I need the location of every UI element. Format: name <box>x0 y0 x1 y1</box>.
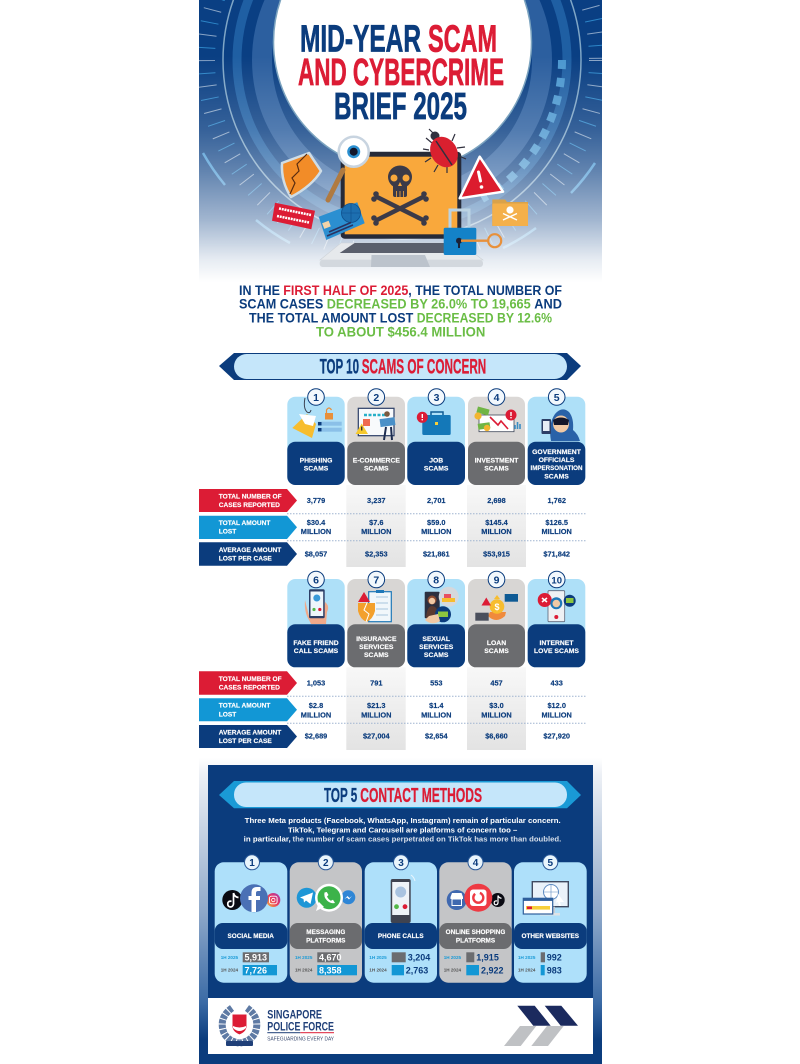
chart: 1H 2025 vs 1H 2024: 1H 2025 <box>444 955 462 960</box>
icons: marketplace, carousell, tiktok <box>447 884 505 912</box>
row labels <box>199 489 297 566</box>
card: phone calls <box>365 855 437 983</box>
chart: 1H 2025 vs 1H 2024: 5,913 <box>244 953 267 963</box>
card: investment scams <box>468 389 525 485</box>
icon: website monitor and browser <box>523 882 568 916</box>
card: other websites: OTHER WEBSITES <box>522 933 580 940</box>
icon: phone <box>391 875 415 923</box>
table values row 1 to 5: MILLION <box>481 527 512 536</box>
card: investment scams: INVESTMENT <box>475 457 519 464</box>
table values row 1 to 5: $30.4 <box>307 518 326 527</box>
row labels: CASES REPORTED <box>219 685 280 692</box>
chart: 1H 2025 vs 1H 2024 <box>295 952 357 976</box>
title: AND CYBERCRIME <box>298 52 504 94</box>
chart: 1H 2025 vs 1H 2024: 1H 2025 <box>221 955 239 960</box>
card: sexual services scams: SCAMS <box>424 652 449 659</box>
summary paragraph: IN THE <box>239 283 280 298</box>
intro text: Three Meta products (Facebook, WhatsApp, Instagram) remain of particular concern. <box>245 816 561 825</box>
card: fake friend call scams: CALL SCAMS <box>294 648 339 655</box>
card: messaging platforms: MESSAGING <box>306 929 345 936</box>
grey column backgrounds <box>346 485 526 567</box>
card: fake friend call scams <box>287 571 345 667</box>
card: online shopping platforms <box>439 855 512 983</box>
card: loan scams: SCAMS <box>484 648 509 655</box>
card: government officials impersonation scams: SCAMS <box>544 473 569 480</box>
table values row 1 to 5: $59.0 <box>427 518 446 527</box>
number badge 9: 9 <box>494 574 500 586</box>
number badge 2: 2 <box>373 392 379 404</box>
summary paragraph: , THE TOTAL NUMBER OF <box>408 283 562 298</box>
icon: credit card <box>319 202 365 240</box>
chart: 1H 2025 vs 1H 2024: 1,915 <box>476 953 499 963</box>
row labels: LOST <box>219 711 236 718</box>
summary paragraph: SCAM CASES <box>239 296 323 312</box>
chart: 1H 2025 vs 1H 2024: 7,726 <box>244 966 267 976</box>
card: internet love scams: LOVE SCAMS <box>534 648 579 655</box>
table values row 1 to 5 <box>301 496 572 559</box>
icon: money bag and loan cards: $ <box>494 602 500 612</box>
table values row 1 to 5: 3,779 <box>307 496 325 505</box>
chart: 1H 2025 vs 1H 2024: 2,922 <box>481 966 504 976</box>
table values row 1 to 5: $8,057 <box>305 550 327 559</box>
chart: 1H 2025 vs 1H 2024: 1H 2024 <box>221 968 239 973</box>
chart: 1H 2025 vs 1H 2024 <box>518 952 562 976</box>
card: insurance services scams: INSURANCE <box>356 636 397 643</box>
title <box>298 18 504 128</box>
card: phishing scams <box>287 389 345 485</box>
chart: 1H 2025 vs 1H 2024 <box>369 952 430 976</box>
intro text: the number of scam cases perpetrated on TikTok has more than doubled. <box>292 834 561 843</box>
intro text: in particular, <box>244 834 291 843</box>
icon: cracked shield <box>282 153 321 197</box>
table values row 1 to 5: $53,915 <box>483 550 510 559</box>
summary paragraph: DECREASED BY 12.6% <box>417 311 552 326</box>
card: loan scams: LOAN <box>487 640 506 647</box>
table values row 6 to 10: MILLION <box>361 710 391 719</box>
card: phishing scams: SCAMS <box>304 466 329 473</box>
icon: phishing envelope <box>292 398 342 438</box>
summary paragraph: TO ABOUT $456.4 MILLION <box>316 325 485 340</box>
table values row 6 to 10: $12.0 <box>547 701 566 710</box>
table values row 6 to 10: $27,004 <box>363 732 391 741</box>
icon: folder with skull <box>492 200 528 226</box>
table values row 1 to 5: $145.4 <box>485 518 509 527</box>
icons: telegram, whatsapp, messenger <box>297 884 355 912</box>
card: messaging platforms <box>290 855 362 983</box>
row labels: TOTAL NUMBER OF <box>219 493 282 500</box>
summary paragraph: AND <box>534 296 562 312</box>
card: insurance services scams <box>347 571 405 667</box>
row labels: LOST PER CASE <box>219 556 272 562</box>
logo text: Singapore Police Force: SAFEGUARDING EVERY DAY <box>267 1036 334 1042</box>
table values row 1 to 5: MILLION <box>361 527 391 536</box>
banner: top 5 contact methods: TOP 5 <box>324 785 357 807</box>
table values row 6 to 10: $1.4 <box>429 701 444 710</box>
row labels <box>199 671 297 748</box>
chart: 1H 2025 vs 1H 2024: 1H 2025 <box>369 955 387 960</box>
card: social media: SOCIAL MEDIA <box>227 933 274 940</box>
card: insurance services scams: SCAMS <box>364 652 389 659</box>
number badge 7: 7 <box>373 574 379 586</box>
row labels: TOTAL AMOUNT <box>219 520 270 527</box>
table values row 1 to 5: MILLION <box>421 527 451 536</box>
chart: 1H 2025 vs 1H 2024: 1H 2025 <box>295 955 313 960</box>
card: phone calls: PHONE CALLS <box>378 933 424 940</box>
chart: 1H 2025 vs 1H 2024: 983 <box>547 966 562 976</box>
icon: falling chart with money <box>474 407 520 432</box>
card: sexual services scams: SEXUAL <box>422 636 450 643</box>
title: SCAM <box>428 18 497 60</box>
chart: 1H 2025 vs 1H 2024: 1H 2024 <box>295 968 313 973</box>
row labels: TOTAL NUMBER OF <box>219 676 282 683</box>
title: BRIEF 2025 <box>334 86 467 128</box>
number badge 1: 1 <box>313 392 319 404</box>
summary paragraph: FIRST HALF OF 2025 <box>283 283 409 298</box>
card: sexual services scams <box>407 571 465 667</box>
icons: tiktok, facebook, instagram <box>222 884 280 912</box>
card: social media <box>215 855 287 983</box>
hero background with rings <box>199 0 602 282</box>
card: other websites <box>514 855 587 983</box>
card: investment scams: SCAMS <box>484 466 509 473</box>
icon: briefcase <box>417 412 451 435</box>
table values row 1 to 5: MILLION <box>301 527 331 536</box>
banner: top 10 scams of concern: TOP 10 <box>320 356 359 378</box>
banner: top 5 contact methods <box>219 781 581 808</box>
row labels: AVERAGE AMOUNT <box>219 547 281 554</box>
chart: 1H 2025 vs 1H 2024 <box>221 952 277 976</box>
banner: top 10 scams of concern: SCAMS OF CONCERN <box>362 356 486 378</box>
row labels: LOST <box>219 529 236 536</box>
banner: top 5 contact methods: CONTACT METHODS <box>360 785 482 807</box>
intro text <box>244 816 561 843</box>
table values row 1 to 5: 2,698 <box>487 496 506 505</box>
number badge 6: 6 <box>313 574 319 586</box>
icon: phone with hearts <box>538 591 576 622</box>
banner: top 10 scams of concern <box>219 353 581 380</box>
table values row 6 to 10: MILLION <box>481 710 512 719</box>
card: job scams: JOB <box>429 457 443 464</box>
row labels: TOTAL AMOUNT <box>219 703 270 710</box>
panel: top 5 contact methods <box>199 758 602 1064</box>
table values row 1 to 5: 3,237 <box>367 496 386 505</box>
card: government officials impersonation scams <box>528 389 585 485</box>
card: internet love scams <box>528 571 585 667</box>
chart: 1H 2025 vs 1H 2024: 992 <box>547 953 562 963</box>
table values row 1 to 5: 2,701 <box>427 496 446 505</box>
footer <box>208 998 593 1054</box>
card: loan scams <box>468 571 525 667</box>
icon: padlock and key <box>444 210 501 255</box>
card: phishing scams: PHISHING <box>300 457 332 464</box>
table values row 6 to 10: MILLION <box>542 710 572 719</box>
chart: 1H 2025 vs 1H 2024: 1H 2024 <box>518 968 536 973</box>
icon: chevrons <box>504 1006 578 1046</box>
icon: phone with woman, bed and money <box>425 587 459 623</box>
card: government officials impersonation scams: IMPERSONATION <box>530 465 583 472</box>
summary paragraph: THE TOTAL AMOUNT LOST <box>249 311 414 326</box>
table values row 6 to 10 <box>301 678 572 741</box>
card: government officials impersonation scams: OFFICIALS <box>539 457 575 464</box>
icon: warning triangle <box>460 157 503 198</box>
number badge 5: 5 <box>554 392 560 404</box>
panel: scams 6 to 10 <box>199 571 586 750</box>
row labels: CASES REPORTED <box>219 502 280 509</box>
table values row 1 to 5: MILLION <box>542 527 572 536</box>
number badge 10: 10 <box>551 575 562 586</box>
logo: police crest <box>222 1008 257 1046</box>
chart: 1H 2025 vs 1H 2024 <box>444 952 504 976</box>
table values row 1 to 5: $2,353 <box>365 550 388 559</box>
table values row 6 to 10: 553 <box>430 678 442 687</box>
card: online shopping platforms: ONLINE SHOPPING <box>446 929 505 936</box>
table values row 1 to 5: 1,762 <box>547 496 566 505</box>
intro text: TikTok, Telegram and Carousell are platforms of concern too – <box>288 825 517 834</box>
number badge 8: 8 <box>433 574 439 586</box>
icon: password card <box>272 203 315 229</box>
card: job scams <box>407 389 465 485</box>
logo text: Singapore Police Force: SINGAPORE <box>267 1008 322 1022</box>
chart: 1H 2025 vs 1H 2024: 8,358 <box>319 966 342 976</box>
card: government officials impersonation scams: GOVERNMENT <box>532 449 582 456</box>
table values row 6 to 10: 1,053 <box>307 678 325 687</box>
summary paragraph: DECREASED BY 26.0% TO 19,665 <box>327 296 531 312</box>
card: e-commerce scams <box>347 389 405 485</box>
row labels: AVERAGE AMOUNT <box>219 730 281 736</box>
icon: clipboard with broken shield <box>358 590 391 622</box>
chart: 1H 2025 vs 1H 2024: 3,204 <box>408 953 430 963</box>
number badge 3: 3 <box>434 392 440 404</box>
card: online shopping platforms: PLATFORMS <box>456 938 496 944</box>
icon: magnifying glass with eye <box>328 137 369 200</box>
card: messaging platforms: PLATFORMS <box>306 938 346 944</box>
panel: scams 1 to 5 <box>199 389 586 567</box>
white title circle <box>274 0 532 171</box>
table values row 1 to 5: $21,861 <box>423 550 450 559</box>
icon: laptop with skull <box>320 152 483 267</box>
number badge 3: 3 <box>398 858 404 869</box>
table values row 6 to 10: $6,660 <box>485 732 508 741</box>
panel: hero <box>199 0 602 282</box>
card: insurance services scams: SERVICES <box>359 644 394 651</box>
table values row 6 to 10: $2,654 <box>425 732 448 741</box>
table values row 6 to 10: 457 <box>490 678 503 687</box>
table values row 6 to 10: $2.8 <box>309 701 323 710</box>
icon: hand holding phone <box>305 589 328 624</box>
icon: red bug <box>423 129 466 173</box>
icon: online store and shopper <box>356 408 395 440</box>
grey column backgrounds <box>346 667 526 750</box>
chart: 1H 2025 vs 1H 2024: 1H 2024 <box>369 968 387 973</box>
chart: 1H 2025 vs 1H 2024: 1H 2025 <box>518 955 536 960</box>
logo text: Singapore Police Force: POLICE FORCE <box>267 1019 334 1033</box>
summary paragraph <box>239 283 562 340</box>
card: sexual services scams: SERVICES <box>419 644 454 651</box>
table values row 6 to 10: 433 <box>551 678 563 687</box>
chart: 1H 2025 vs 1H 2024: 2,763 <box>406 966 428 976</box>
table values row 1 to 5: $7.6 <box>369 518 383 527</box>
table values row 6 to 10: MILLION <box>421 710 451 719</box>
number badge 4: 4 <box>473 858 479 869</box>
number badge 2: 2 <box>323 858 329 869</box>
number badge 4: 4 <box>494 392 500 404</box>
number badge 1: 1 <box>249 858 255 869</box>
card: e-commerce scams: E-COMMERCE <box>353 457 400 464</box>
table values row 6 to 10: $21.3 <box>367 701 386 710</box>
logo text: Singapore Police Force <box>267 1008 334 1042</box>
icon: hooded scammer with phone <box>542 409 580 441</box>
table values row 6 to 10: $27,920 <box>543 732 570 741</box>
card: e-commerce scams: SCAMS <box>364 466 389 473</box>
card: job scams: SCAMS <box>424 466 449 473</box>
title: MID-YEAR <box>300 18 421 60</box>
table values row 6 to 10: 791 <box>370 678 382 687</box>
table values row 6 to 10: $3.0 <box>489 701 504 710</box>
card: fake friend call scams: FAKE FRIEND <box>293 640 339 647</box>
chart: 1H 2025 vs 1H 2024: 4,670 <box>319 953 342 963</box>
table values row 1 to 5: $126.5 <box>545 518 568 527</box>
table values row 1 to 5: $71,842 <box>543 550 570 559</box>
row labels: LOST PER CASE <box>219 738 272 745</box>
table values row 6 to 10: MILLION <box>301 710 331 719</box>
chart: 1H 2025 vs 1H 2024: 1H 2024 <box>444 968 462 973</box>
table values row 6 to 10: $2,689 <box>305 732 327 741</box>
card: internet love scams: INTERNET <box>540 640 574 647</box>
number badge 5: 5 <box>548 858 554 869</box>
